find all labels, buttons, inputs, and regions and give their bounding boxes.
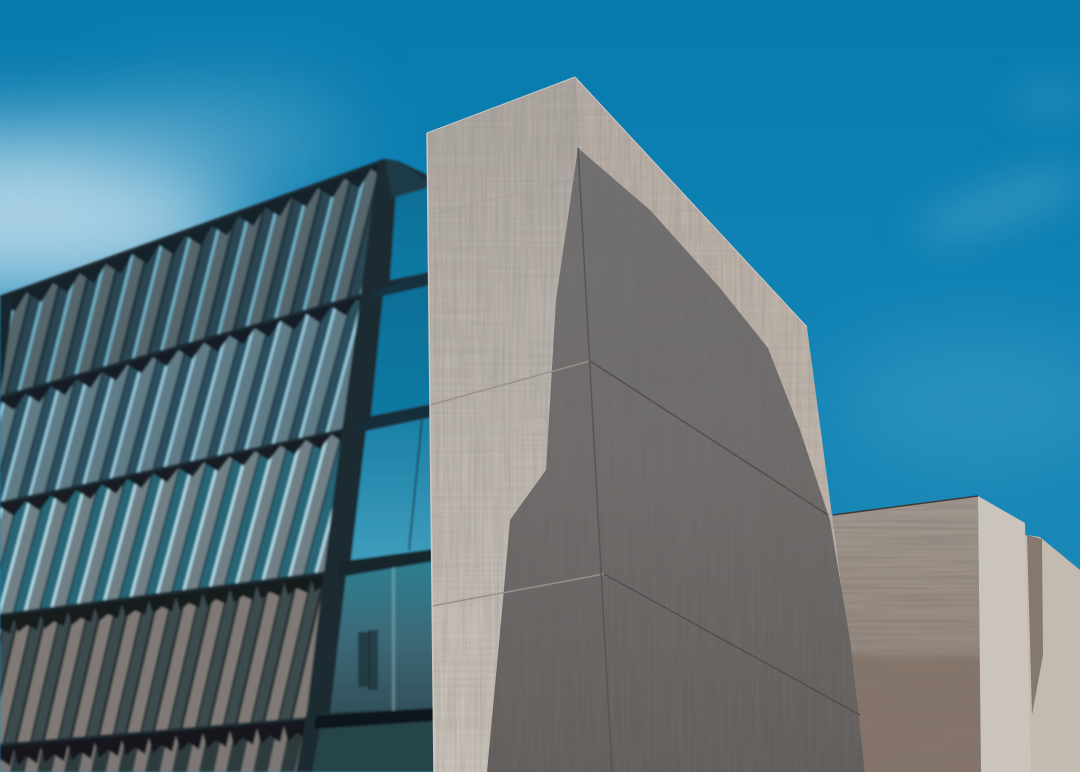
concrete texture	[425, 75, 870, 772]
window pane 4	[330, 561, 436, 713]
left face	[427, 77, 612, 772]
louvre row 4	[0, 572, 332, 745]
window pane 1	[390, 186, 430, 280]
block 3: far right wall	[1015, 535, 1080, 772]
glass facade with louvres	[0, 159, 440, 772]
main concrete block	[425, 75, 870, 772]
cast shadow	[487, 148, 865, 772]
reflected building in lower pane	[358, 420, 422, 711]
steel beams	[0, 160, 385, 745]
facade dark backing	[0, 159, 440, 772]
louvre row 5	[0, 718, 315, 772]
window pane 2	[371, 285, 431, 416]
window pane 3	[351, 417, 434, 560]
right lit face	[575, 77, 865, 772]
louvre row 2	[0, 293, 365, 503]
formwork seams and corner	[427, 77, 860, 772]
louvre row 1	[0, 159, 385, 397]
window pane 5	[308, 721, 436, 772]
block 2: shadowed wall and lit side	[820, 490, 1031, 772]
steel mullion and transoms	[296, 159, 436, 772]
louvre row 3	[0, 428, 350, 615]
